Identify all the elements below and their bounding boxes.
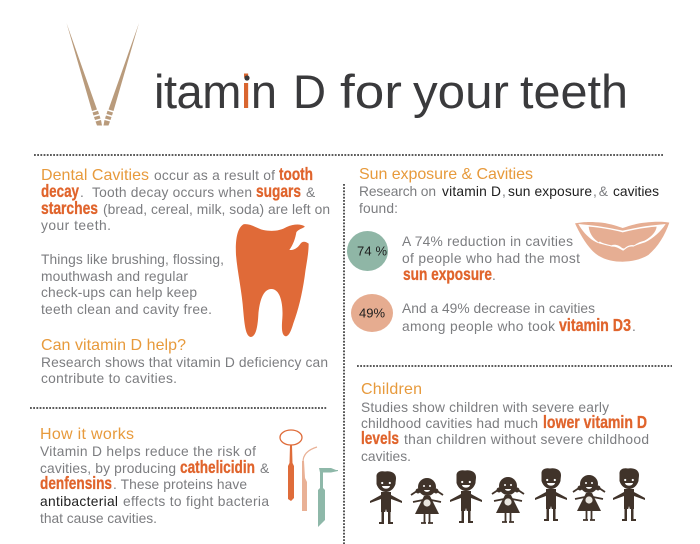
title text: D — [293, 65, 326, 118]
title — [66, 23, 628, 126]
text block: research intro: , — [502, 184, 506, 199]
title text: your — [413, 65, 509, 118]
stat: 74%: 74 % — [357, 244, 387, 258]
panel: how it works — [40, 426, 338, 527]
text block: prevention: Things like brushing, flossing, — [41, 252, 224, 267]
text block: how it works: antibacterial — [40, 494, 118, 509]
text block: 74% reduction: . — [492, 268, 496, 283]
text block: how it works: . These proteins have — [113, 477, 247, 492]
text block: 49% decrease: And a 49% decrease in cavities — [402, 301, 595, 316]
text block: how it works: & — [260, 461, 269, 476]
text block: research intro: found: — [359, 201, 398, 216]
text block: cavities intro — [41, 164, 330, 233]
text block: 74% reduction: A 74% reduction in cavities — [402, 234, 573, 249]
text block: research intro: cavities — [613, 184, 659, 199]
text block: cavities intro: Dental Cavities — [41, 167, 149, 184]
heading: sun exposure: Sun exposure & Cavities — [359, 166, 533, 183]
icon: dental instruments — [280, 430, 338, 527]
icon: chipped tooth — [236, 224, 309, 337]
text block: how it works: denfensins — [40, 473, 112, 493]
text block: prevention: teeth clean and cavity free. — [41, 302, 212, 317]
title text: for — [340, 65, 402, 118]
text block: how it works — [40, 444, 269, 526]
stat: 49%: 49% — [359, 306, 385, 320]
text block: prevention — [41, 252, 224, 317]
text block: 49% decrease: among people who took — [402, 319, 555, 334]
text block: 74% reduction: sun exposure — [403, 264, 492, 284]
text block: children: lower vitamin D — [543, 412, 647, 432]
text block: how it works: effects to fight bacteria — [123, 494, 269, 509]
text block: cavities intro: decay — [41, 181, 79, 201]
text block: children: cavities. — [361, 449, 411, 464]
title text — [154, 65, 628, 118]
stat: 74% — [347, 231, 388, 271]
heading: how it works: How it works — [40, 426, 134, 443]
text block: how it works: Vitamin D helps reduce the risk of — [40, 444, 256, 459]
text block: 49% decrease — [402, 301, 636, 335]
icon: row of children — [370, 468, 645, 524]
text block: cavities intro: tooth — [279, 164, 313, 184]
text block: research intro — [359, 184, 659, 216]
text block: research: contribute to cavities. — [41, 371, 177, 386]
icon: dental pick letter V — [66, 23, 139, 126]
text block: children — [361, 400, 649, 464]
heading: children: Children — [361, 381, 422, 398]
text block: 74% reduction: of people who had the most — [402, 251, 580, 266]
text block: children: levels — [361, 428, 399, 448]
text block: prevention: check-ups can help keep — [41, 285, 197, 300]
text block: cavities intro: occur as a result of — [154, 168, 275, 183]
text block: how it works: cavities, by producing — [40, 461, 176, 476]
heading: can vitamin D help: Can vitamin D help? — [41, 337, 186, 354]
text block: children: childhood cavities had much — [361, 416, 538, 431]
text block: research intro: Research on — [359, 184, 436, 199]
text block: cavities intro: your teeth. — [41, 218, 111, 233]
text block: research intro: , & — [593, 184, 608, 199]
title text: itamin — [154, 65, 277, 118]
text block: cavities intro: sugars — [256, 181, 301, 201]
text block: how it works: cathelicidin — [180, 457, 255, 477]
panel: dental cavities — [41, 164, 330, 386]
stat: 49% — [351, 294, 393, 332]
icon: smile — [575, 222, 669, 262]
text block: children: than children without severe childhood — [404, 432, 649, 447]
icon: dental tool i-dot — [244, 75, 250, 81]
text block: research intro: sun exposure — [508, 184, 592, 199]
text block: research intro: vitamin D — [442, 184, 501, 199]
text block: research — [41, 355, 328, 386]
text block: how it works: that cause cavities. — [40, 511, 157, 526]
panel: sun exposure — [347, 166, 669, 335]
text block: cavities intro: . — [80, 185, 84, 200]
text block: 49% decrease: vitamin D3 — [559, 315, 631, 335]
text block: cavities intro: & — [306, 185, 315, 200]
text block: 74% reduction — [402, 234, 580, 284]
text block: cavities intro: Tooth decay occurs when — [92, 185, 252, 200]
title text: teeth — [520, 65, 628, 118]
text block: 49% decrease: . — [632, 319, 636, 334]
text block: cavities intro: (bread, cereal, milk, soda) are left on — [103, 202, 330, 217]
text block: prevention: mouthwash and regular — [41, 269, 188, 284]
panel: children — [361, 381, 649, 524]
text block: cavities intro: starches — [41, 198, 98, 218]
text block: children: Studies show children with severe early — [361, 400, 609, 415]
text block: research: Research shows that vitamin D deficiency can — [41, 355, 328, 370]
